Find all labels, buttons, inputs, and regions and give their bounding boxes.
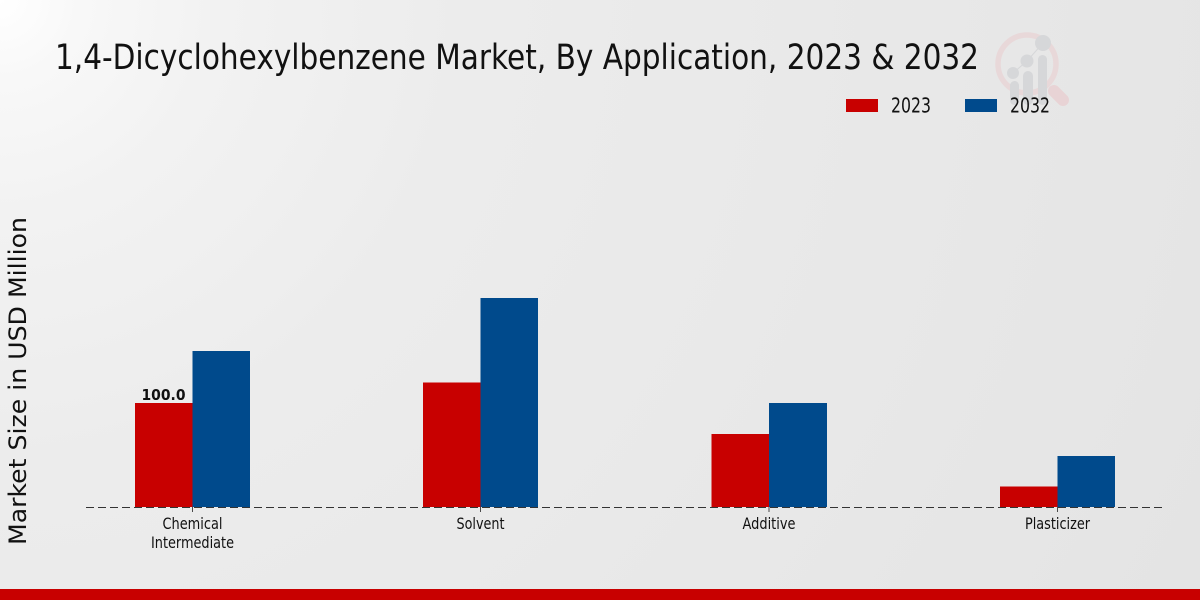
legend [846, 94, 1050, 118]
bars: Solvent [423, 298, 538, 507]
data label: 100.0: 100.0 [142, 386, 186, 404]
bars: Additive [712, 403, 827, 507]
title: 1,4-Dicyclohexylbenzene Market, By Application, 2023 & 2032 [55, 38, 979, 78]
x label: Chemical Intermediate: Chemical [162, 514, 222, 533]
footer bar [0, 589, 1200, 600]
bars: Chemical Intermediate [135, 351, 250, 507]
legend item: 2023: 2023 [891, 94, 931, 118]
bar chart [86, 298, 1164, 552]
x label: Chemical Intermediate: Intermediate [151, 533, 234, 552]
legend item: 2023 [846, 94, 931, 118]
x label: Plasticizer: Plasticizer [1025, 514, 1090, 533]
x label: Chemical Intermediate [151, 514, 234, 552]
legend item: 2032: 2032 [1010, 94, 1050, 118]
x label: Solvent: Solvent [456, 514, 504, 533]
x label: Additive: Additive [742, 514, 796, 533]
x axis baseline [86, 507, 1164, 512]
y axis title: Market Size in USD Million [4, 217, 32, 545]
icon: watermark logo [998, 35, 1063, 105]
bars: Plasticizer [1000, 456, 1115, 507]
legend item: 2032 [965, 94, 1050, 118]
